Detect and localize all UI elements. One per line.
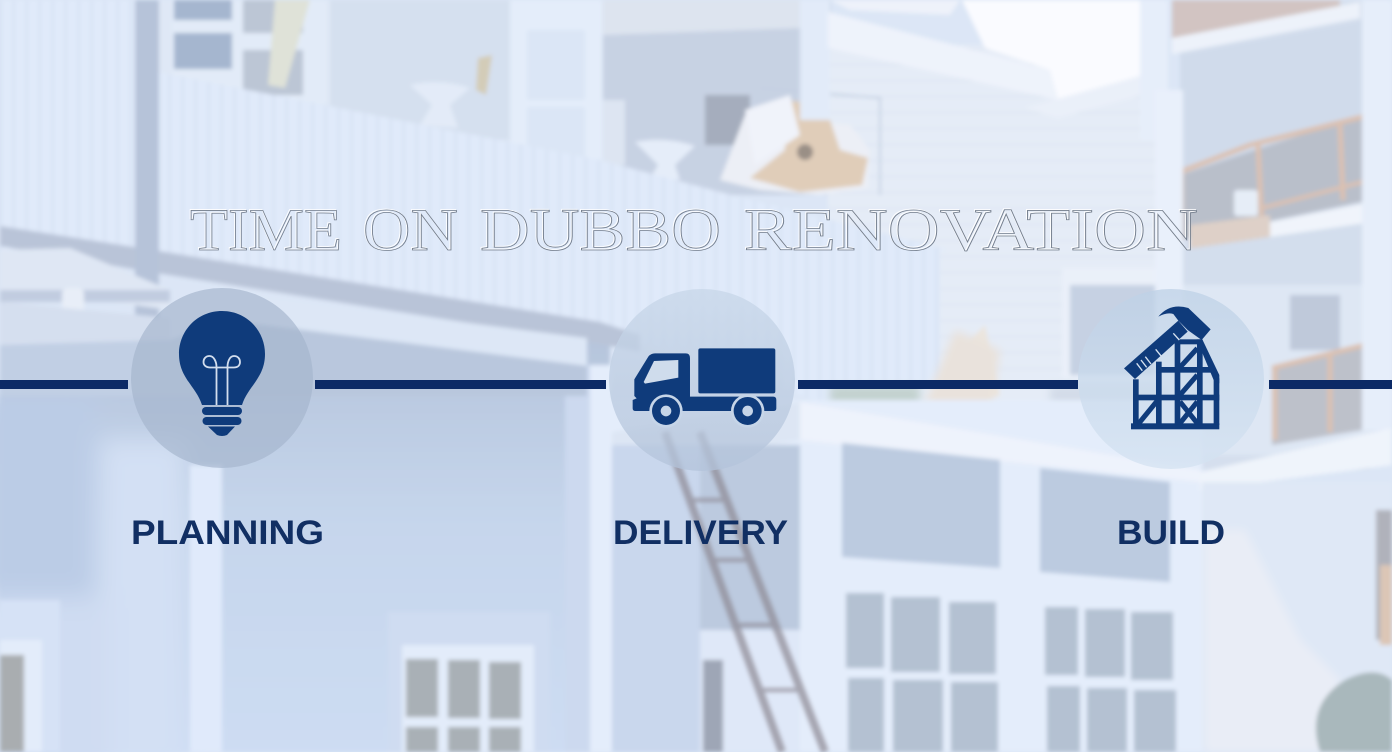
circle: delivery [609,289,795,471]
label: delivery: DELIVERY [613,514,788,552]
title: DUBBO [480,197,721,263]
upper window and room [158,0,518,150]
sky [962,0,1142,100]
bush [1316,672,1392,752]
shutter column [510,0,602,165]
hammer handle [1124,321,1188,379]
top left siding [0,0,142,250]
label: planning: PLANNING [131,514,324,552]
icon: truck [633,348,776,428]
circle: build [1078,289,1264,469]
clutter on ledge [830,385,920,415]
vase upper [410,82,470,128]
downspout [135,0,159,330]
step: delivery [609,289,795,552]
lower left windows [388,612,550,752]
room under title right [1062,268,1172,378]
icon: hammer and house frame [1124,307,1219,429]
title: ON [363,197,458,263]
title: RENOVATION [744,197,1198,263]
right siding wall [828,45,1158,410]
pile of materials [720,105,870,195]
lower wall left [0,340,610,752]
siding lower right panel [940,250,1065,410]
step: build [1078,289,1264,552]
circle: planning [131,288,313,468]
soffit strip [225,292,587,368]
railing lower [1272,335,1392,445]
gutter [0,226,640,352]
balcony siding band [158,72,950,402]
step: planning [131,288,324,552]
label: build: BUILD [1117,514,1225,552]
pillar and roof [800,0,830,120]
main vertical pillars right [1140,0,1168,140]
right lower wall [1202,482,1392,752]
lower right structure [612,400,1202,752]
right side upper rooms [1180,0,1370,470]
ladder [665,432,825,752]
icon: light bulb [179,311,265,436]
upper middle room [603,0,831,195]
railing upper [1180,112,1370,240]
timeline line [0,380,1392,389]
hammer head [1158,307,1211,340]
title: TIME [190,197,342,263]
ledges under gutter [0,248,170,310]
title [190,197,1198,263]
